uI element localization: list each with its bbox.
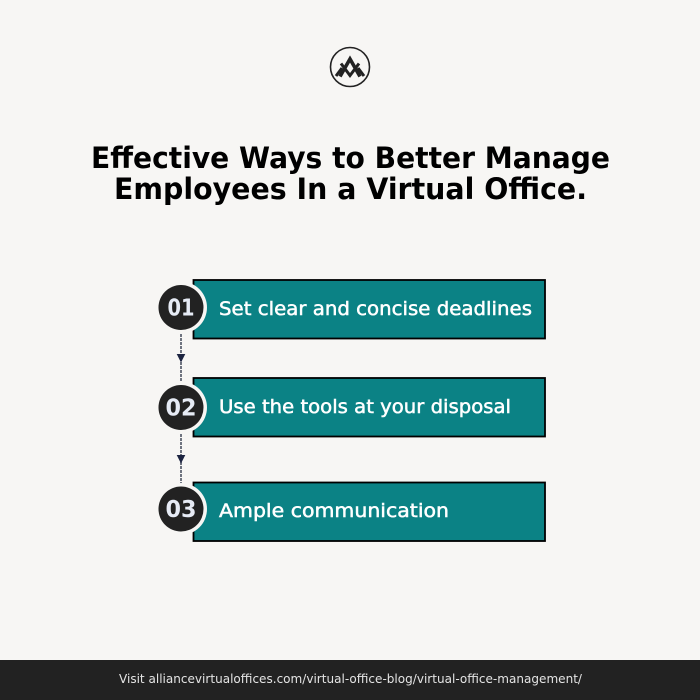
footer bar xyxy=(0,660,700,700)
step 1 text: Set clear and concise deadlines xyxy=(219,298,532,320)
title xyxy=(91,141,610,206)
step 1 badge: 01 xyxy=(168,296,194,322)
step 1 badge xyxy=(155,282,207,334)
arrow: step 1 to step 2 xyxy=(177,330,185,385)
step 2 bar xyxy=(194,378,545,436)
panel: step 2 xyxy=(155,378,545,436)
title: Employees In a Virtual Office. xyxy=(114,172,587,206)
title: Effective Ways to Better Manage xyxy=(91,141,610,175)
step 3 text: Ample communication xyxy=(219,500,449,522)
step 3 badge xyxy=(155,483,207,535)
step 2 badge: 02 xyxy=(166,396,196,422)
panel: step 1 xyxy=(155,280,545,338)
footer link text: Visit alliancevirtualoffices.com/virtual-office-blog/virtual-office-management/ xyxy=(119,671,583,686)
step 3 badge: 03 xyxy=(166,497,196,523)
panel: step 3 xyxy=(155,482,545,541)
step 2 badge xyxy=(155,382,207,434)
step 1 bar xyxy=(194,280,545,338)
icon: company logo xyxy=(330,48,370,86)
step 2 text: Use the tools at your disposal xyxy=(219,396,511,418)
step 3 bar xyxy=(194,482,545,541)
arrow: step 2 to step 3 xyxy=(177,430,185,488)
